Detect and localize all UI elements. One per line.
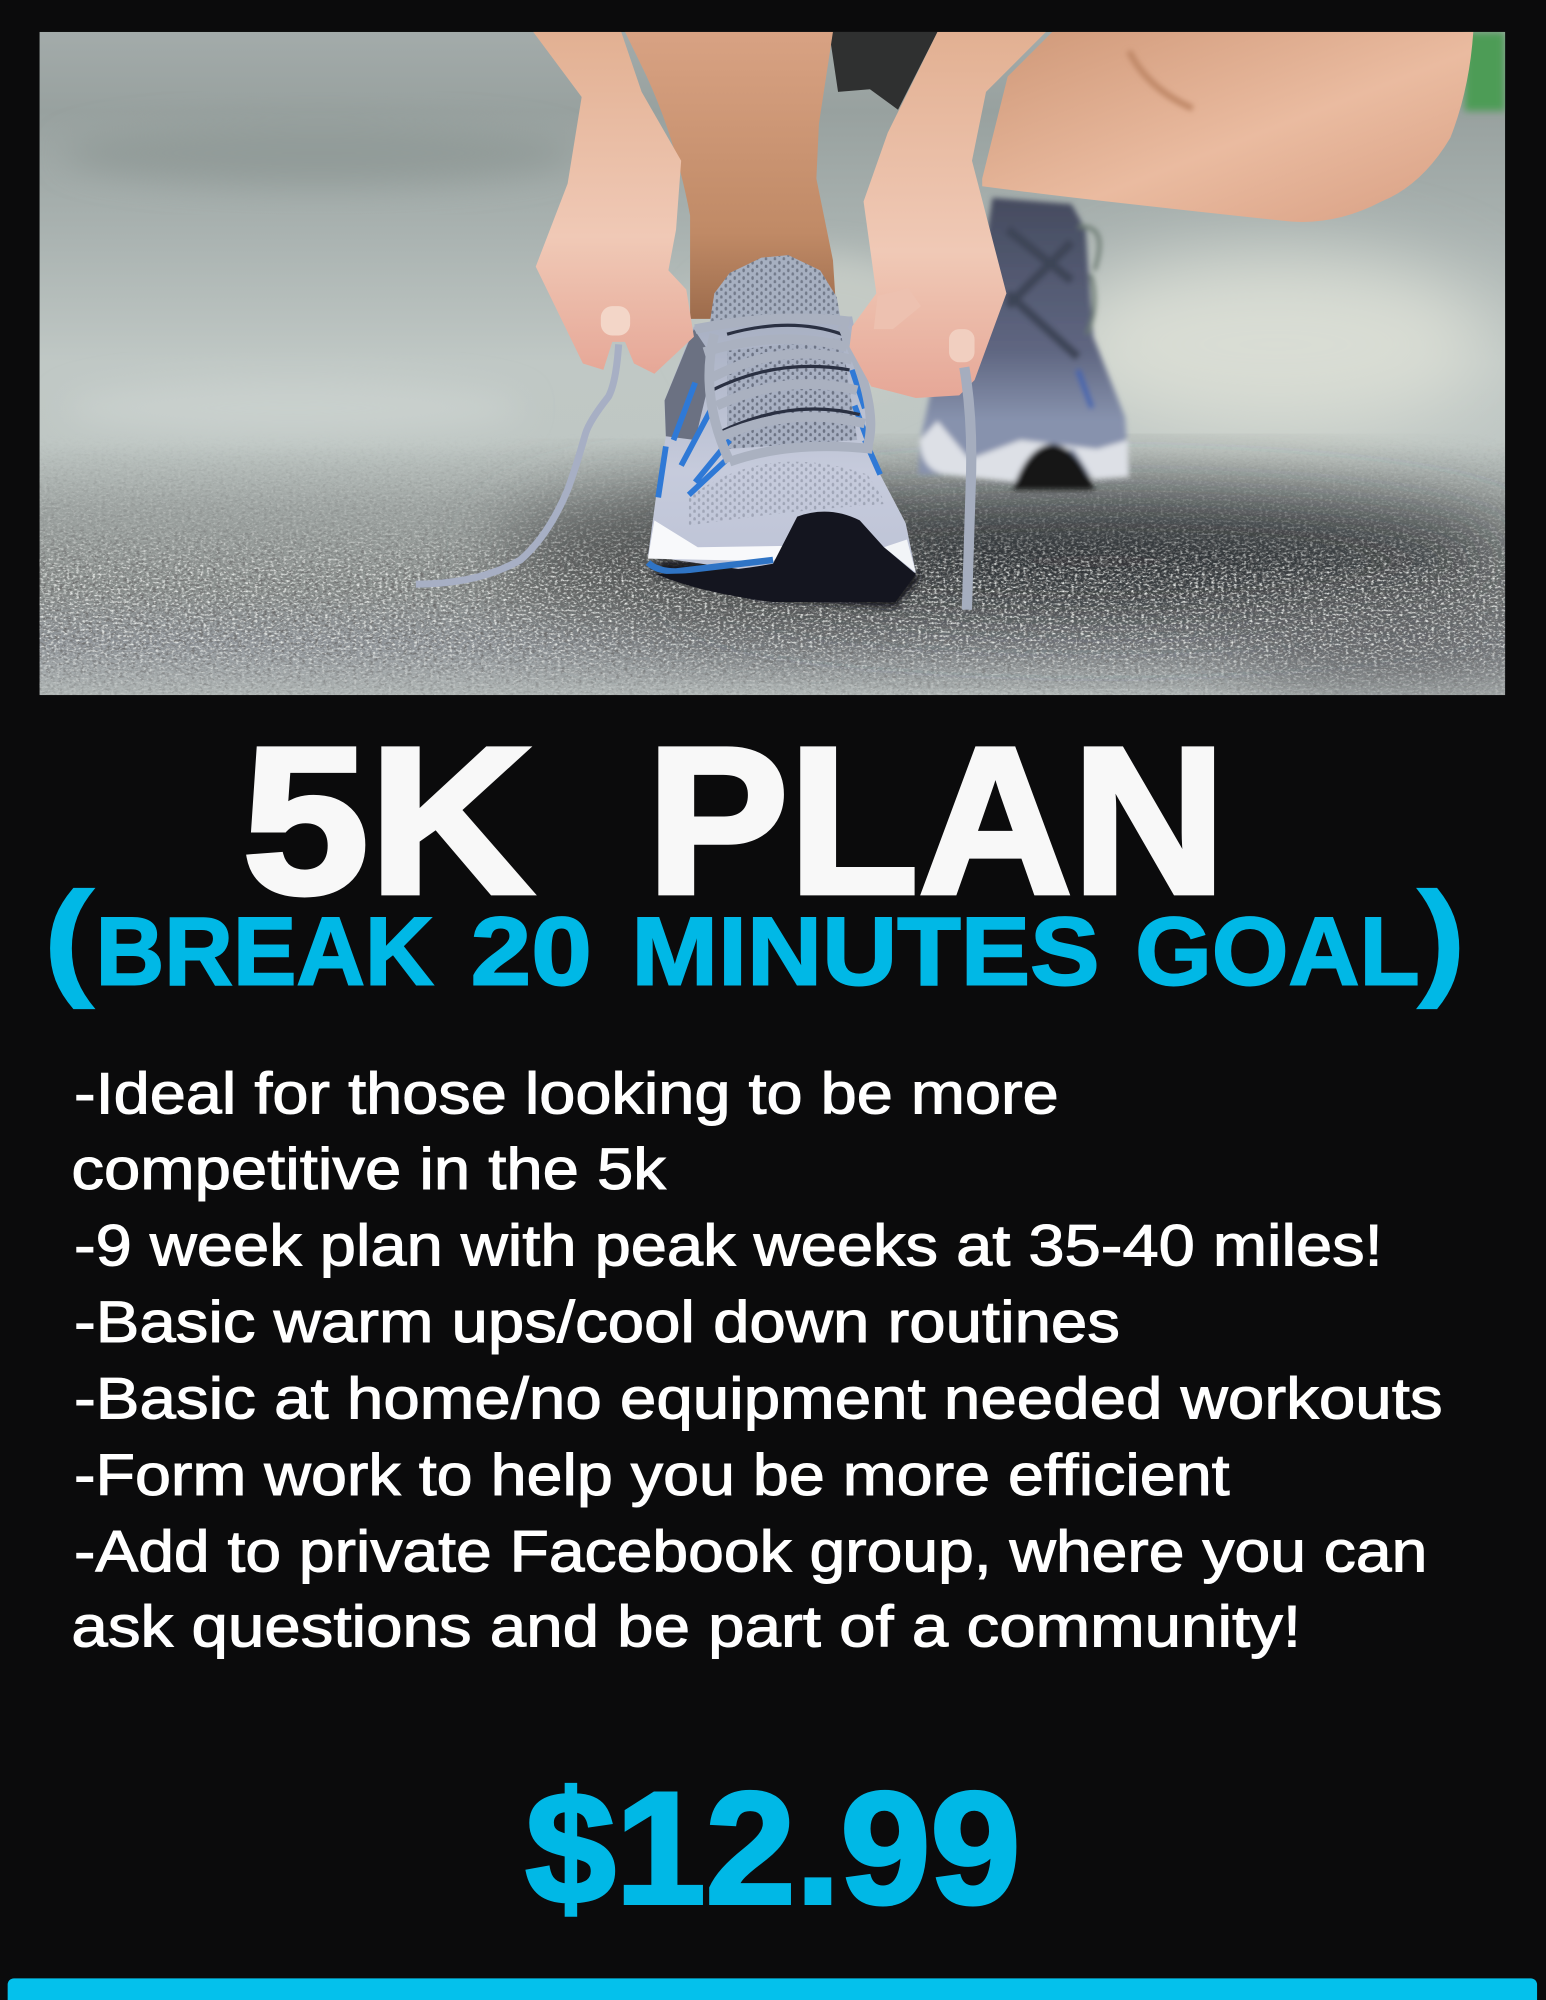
title word: 5K: 5K (242, 705, 533, 938)
toe cap (656, 512, 916, 602)
bottom call-to-action bar (8, 1978, 1537, 2000)
subtitle: break 20 minutes goal (42, 864, 1467, 1010)
subtitle word: MINUTES: MINUTES (631, 897, 1100, 1006)
left lace (416, 344, 619, 584)
tongue mesh (711, 255, 839, 322)
right lace (964, 367, 971, 610)
feature: warm ups: -Basic warm ups/cool down routines (74, 1290, 1120, 1355)
title: 5K PLAN (242, 705, 1226, 938)
rear shoe (918, 198, 1129, 490)
subtitle word: BREAK: BREAK (96, 897, 434, 1006)
hero photo: hands tying running shoe lace (40, 32, 1546, 695)
upper (648, 316, 916, 574)
asphalt grain (40, 460, 1506, 695)
centre mesh (727, 362, 857, 449)
shadow under shoe (651, 561, 921, 607)
closing parenthesis: ) (1416, 864, 1467, 1010)
front shoe (648, 255, 921, 607)
dark side panel (664, 329, 706, 440)
tongue (709, 255, 842, 327)
right forearm and hand (850, 32, 1046, 398)
thigh crease (1129, 51, 1193, 108)
ankle (625, 32, 837, 319)
subtitle number: 20: 20 (471, 897, 592, 1006)
subtitle word: GOAL: GOAL (1135, 897, 1420, 1006)
feature: facebook group, second line: ask questions and be part of a community! (71, 1595, 1301, 1660)
laces (695, 318, 872, 462)
feature: home workouts: -Basic at home/no equipment needed workouts (74, 1366, 1443, 1431)
left thumbnail (601, 306, 630, 335)
white midsole (648, 520, 788, 561)
feature: form work: -Form work to help you be more efficient (74, 1443, 1230, 1508)
thigh (982, 32, 1473, 222)
right thumbnail (949, 329, 975, 362)
feature: 9 week plan: -9 week plan with peak weeks at 35-40 miles! (74, 1213, 1383, 1278)
blurred pavement background (40, 32, 1546, 695)
blue sole line (648, 560, 773, 571)
blue stripes (658, 370, 880, 497)
feature: facebook group: -Add to private Facebook group, where you can (74, 1519, 1427, 1584)
opening parenthesis: ( (42, 864, 96, 1010)
lace shadows (712, 325, 860, 431)
feature: ideal for: -Ideal for those looking to be more (74, 1062, 1059, 1127)
white midsole, outer side (884, 540, 916, 573)
title word: PLAN: PLAN (647, 705, 1226, 938)
toe perforations (689, 462, 887, 526)
feature list (71, 1062, 1443, 1660)
left forearm and hand (533, 32, 694, 374)
right fingers (874, 288, 921, 329)
shaded shorts behind the legs (829, 32, 938, 110)
price: $12.99 (526, 1759, 1020, 1937)
feature: ideal for, second line: competitive in the 5k (71, 1137, 667, 1202)
